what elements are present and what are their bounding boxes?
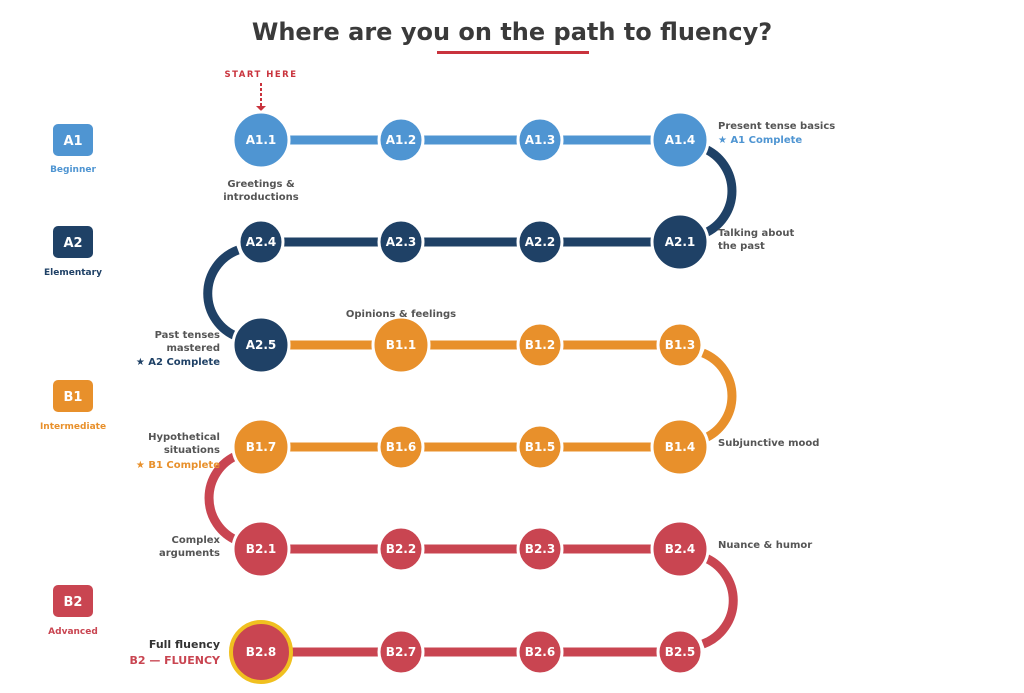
level badge B1: Intermediate [40,422,106,432]
node labels: B1.3 [665,338,695,352]
milestone annotations: B2 — FLUENCY [129,654,221,667]
level badge A1: Beginner [50,165,96,175]
node labels: A2.4 [246,235,276,249]
node labels: B2.2 [386,542,416,556]
node labels: A2.1 [665,235,695,249]
level badge B1 [40,380,106,432]
node labels: A1.2 [386,133,416,147]
node labels: B1.2 [525,338,555,352]
node labels: A1.1 [246,133,276,147]
node labels: B2.6 [525,645,555,659]
nodes [231,112,708,682]
milestone annotations: Greetings & [227,179,295,190]
milestone annotations: Full fluency [149,638,220,651]
title: Where are you on the path to fluency? [252,18,772,46]
milestone annotations: ★ A2 Complete [136,357,220,368]
node labels: B1.4 [665,440,695,454]
level badge A2 [44,226,102,278]
milestone annotations: Complex [172,535,221,546]
node labels: B2.3 [525,542,555,556]
milestone annotations [129,121,835,667]
level badge A1: A1 [63,134,83,149]
level badge B2: B2 [64,595,82,610]
milestone annotations: Opinions & feelings [346,309,456,320]
level badge B2: Advanced [48,627,98,637]
milestone annotations: ★ B1 Complete [136,460,220,471]
path connectors [208,140,733,652]
level badge B1: B1 [64,390,82,405]
node labels: A2.2 [525,235,555,249]
node labels: A2.5 [246,338,276,352]
milestone annotations: introductions [223,192,299,203]
milestone annotations: Present tense basics [718,121,835,132]
start here marker: START HERE [224,70,298,80]
node labels: B2.4 [665,542,695,556]
milestone annotations: ★ A1 Complete [718,135,802,146]
node labels: B2.7 [386,645,416,659]
milestone annotations: the past [718,241,765,252]
node labels: B1.5 [525,440,555,454]
node labels: A1.3 [525,133,555,147]
node labels: A2.3 [386,235,416,249]
milestone annotations: Hypothetical [148,432,220,443]
node labels: B1.6 [386,440,416,454]
node labels: B1.7 [246,440,276,454]
node labels: A1.4 [665,133,695,147]
level badge A2: A2 [63,236,83,251]
node labels: B2.8 [246,645,276,659]
milestone annotations: Nuance & humor [718,540,812,551]
node labels [246,133,695,659]
milestone annotations: situations [164,445,220,456]
node labels: B2.5 [665,645,695,659]
level badge B2 [48,585,98,637]
node labels: B1.1 [386,338,416,352]
start here marker [224,70,298,111]
milestone annotations: Talking about [718,228,794,239]
milestone annotations: Past tenses [155,330,220,341]
milestone annotations: arguments [159,548,220,559]
level badge A2: Elementary [44,268,102,278]
milestone annotations: mastered [166,343,220,354]
milestone annotations: Subjunctive mood [718,438,819,449]
level badge A1 [50,124,96,175]
node labels: B2.1 [246,542,276,556]
